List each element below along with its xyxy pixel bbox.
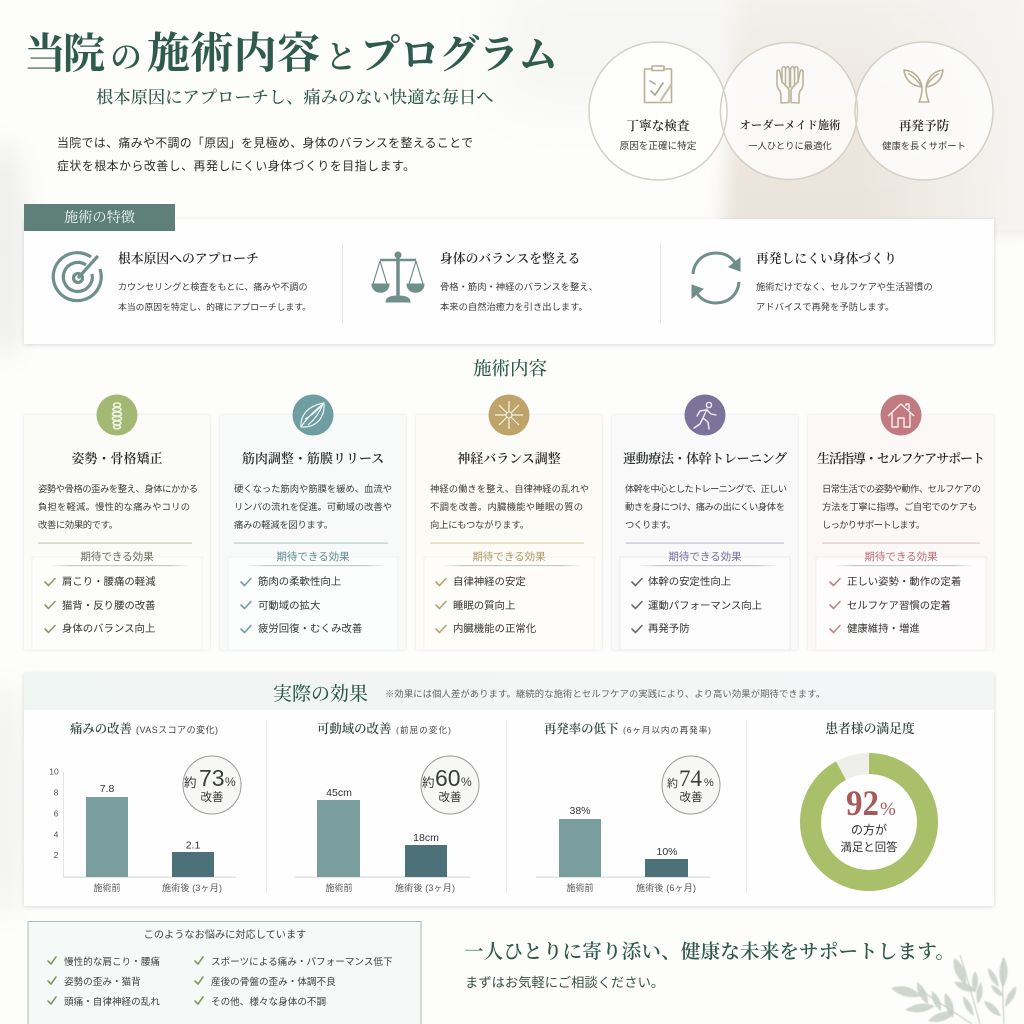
- chart: recurrence: (6ヶ月以内の再発率): [623, 725, 711, 735]
- panel: lifestyle card: しっかりサポートします。: [822, 520, 925, 530]
- promise: careful examination: 原因を正確に特定: [620, 140, 697, 152]
- closing message: 一人ひとりに寄り添い、健康な未来をサポートします。: [464, 941, 955, 963]
- chart: pain: 痛みの改善: [70, 721, 132, 736]
- promise: recurrence prevention: 再発予防: [899, 118, 950, 133]
- chart: satisfaction donut: [810, 721, 928, 880]
- panel: posture card: [24, 394, 210, 650]
- title: 当院: [24, 31, 105, 78]
- panel: posture card: 姿勢や骨格の歪みを整え、身体にかかる: [38, 483, 198, 494]
- closing message: [464, 941, 955, 990]
- panel: exercise card: 運動療法・体幹トレーニング: [623, 451, 787, 466]
- effects box: 正しい姿勢・動作の定着: [847, 575, 961, 588]
- panel: nerve card: [416, 394, 602, 650]
- title: [24, 30, 558, 78]
- panel: lifestyle card: 生活指導・セルフケアサポート: [817, 451, 985, 466]
- bar: before: 38%: [569, 805, 591, 817]
- intro text: 症状を根本から改善し、再発しにくい身体づくりを目指します。: [57, 159, 415, 173]
- heading: treatment content: 施術内容: [473, 359, 547, 380]
- feature: root cause: [53, 251, 311, 312]
- badge: 60%: [421, 756, 479, 814]
- promise: recurrence prevention: 健康を長くサポート: [882, 140, 966, 151]
- feature: body balance: [372, 251, 598, 312]
- chart: pain: [49, 721, 241, 893]
- badge: 73%: 改善: [200, 790, 224, 804]
- panel: three promises: [589, 42, 993, 180]
- panel: muscle card: 筋肉調整・筋膜リリース: [242, 451, 384, 466]
- bar: after: 2.1: [186, 840, 200, 852]
- icon: scales: [372, 252, 424, 302]
- title: と: [325, 39, 357, 75]
- feature: recurrence resistant body: アドバイスで再発を予防します。: [756, 301, 894, 312]
- bar: before: 45cm: [326, 787, 352, 799]
- effects box: 期待できる効果: [472, 550, 546, 563]
- closing message: まずはお気軽にご相談ください。: [465, 975, 664, 990]
- badge: 74%: [662, 756, 720, 814]
- feature: recurrence resistant body: 再発しにくい身体づくり: [756, 251, 897, 266]
- panel: muscle card: 硬くなった筋肉や筋膜を緩め、血流や: [234, 483, 392, 494]
- icon: cycle arrows: [692, 253, 740, 303]
- panel: conditions list: 頭痛・自律神経の乱れ: [64, 996, 160, 1008]
- chart: satisfaction donut: 92: [846, 783, 879, 823]
- chart: satisfaction donut: 満足と回答: [841, 840, 898, 854]
- panel: nerve card: 神経の働きを整え、自律神経の乱れや: [430, 483, 589, 494]
- chart: pain: 4: [54, 830, 59, 840]
- chart: pain: 2: [54, 850, 59, 860]
- chart: pain: 8: [54, 788, 59, 798]
- panel: conditions list: [28, 922, 421, 1024]
- bar: before: 施術前: [566, 882, 594, 893]
- effects box: 運動パフォーマンス向上: [648, 599, 762, 612]
- badge: 74%: %: [704, 777, 714, 789]
- badge: 73%: 73: [199, 765, 225, 791]
- feature: root cause: 根本原因へのアプローチ: [118, 251, 259, 266]
- bar: before: 施術前: [93, 882, 121, 893]
- chart: pain: 6: [54, 808, 59, 818]
- bar: before: [86, 783, 128, 893]
- effects box: 筋肉の柔軟性向上: [258, 575, 341, 588]
- badge: 60%: 改善: [438, 790, 462, 804]
- badge: 74%: 改善: [680, 790, 702, 804]
- effects box: 疲労回復・むくみ改善: [258, 622, 362, 635]
- bar: after: 10%: [656, 846, 678, 858]
- panel: exercise card: [612, 394, 798, 650]
- title: の: [110, 39, 142, 75]
- panel: posture card: 姿勢・骨格矯正: [71, 451, 163, 466]
- badge: 60%: 約: [422, 775, 435, 790]
- panel: lifestyle card: [808, 394, 994, 650]
- panel: conditions list: 産後の骨盤の歪み・体調不良: [211, 976, 336, 988]
- effects box: 肩こり・腰痛の軽減: [62, 575, 156, 588]
- effects box: 期待できる効果: [864, 550, 938, 563]
- badge: 60%: 60: [435, 765, 461, 791]
- panel: conditions list: 姿勢の歪み・猫背: [64, 976, 141, 988]
- effects box: 内臓機能の正常化: [453, 622, 537, 635]
- intro text: [57, 136, 473, 173]
- effects box: 睡眠の質向上: [453, 599, 515, 612]
- panel: posture card: 改善に効果的です。: [38, 519, 118, 530]
- chart: range of motion: (前屈の変化): [396, 725, 451, 735]
- panel: nerve card: 神経バランス調整: [457, 451, 561, 466]
- chart: pain: (VASスコアの変化): [136, 724, 218, 735]
- panel: treatment features: [24, 204, 994, 344]
- chart: recurrence: 再発率の低下: [544, 721, 619, 736]
- effects box: 健康維持・増進: [847, 622, 920, 635]
- icon: runner: [684, 394, 726, 436]
- badge: 74%: 約: [667, 776, 678, 790]
- bar: before: [559, 805, 601, 893]
- effects box: 再発予防: [648, 622, 690, 635]
- promise: careful examination: 丁寧な検査: [627, 118, 690, 133]
- effects box: 期待できる効果: [668, 550, 742, 563]
- effects box: 可動域の拡大: [258, 599, 320, 612]
- effects box: [32, 550, 202, 650]
- effects box: 身体のバランス向上: [62, 622, 155, 635]
- bar: before: [317, 787, 360, 893]
- panel: conditions list: このようなお悩みに対応しています: [144, 928, 306, 941]
- panel: muscle card: 痛みの軽減を図ります。: [234, 519, 333, 530]
- icon: muscle leaf: [292, 394, 334, 436]
- effects box: [228, 550, 398, 650]
- bar: after: 施術後 (3ヶ月): [395, 882, 455, 893]
- feature: body balance: 骨格・筋肉・神経のバランスを整え、: [440, 281, 598, 292]
- badge: 60%: %: [461, 775, 472, 789]
- decorative leaves: [891, 955, 1016, 1024]
- chart: satisfaction donut: 患者様の満足度: [825, 721, 915, 736]
- icon: house: [880, 394, 922, 436]
- chart: satisfaction donut: の方が: [851, 822, 887, 837]
- effects box: [424, 550, 594, 650]
- promise: custom treatment: 一人ひとりに最適化: [748, 140, 832, 151]
- bar: after: [395, 832, 455, 893]
- panel: exercise card: つくります。: [625, 520, 676, 530]
- effects box: セルフケア習慣の定着: [847, 599, 951, 612]
- chart: recurrence: [536, 721, 720, 893]
- panel: muscle card: リンパの流れを促進。可動域の改善や: [234, 501, 392, 512]
- bar: before: 施術前: [325, 882, 353, 893]
- icon: clipboard: [644, 66, 672, 102]
- note: ※効果には個人差があります。継続的な施術とセルフケアの実践により、より高い効果が期待できます。: [385, 688, 825, 699]
- promise: careful examination: [589, 42, 727, 180]
- effects box: [620, 550, 790, 650]
- effects box: 体幹の安定性向上: [648, 575, 731, 588]
- feature: recurrence resistant body: [692, 251, 933, 312]
- panel: nerve card: 不調を改善。内臓機能や睡眠の質の: [430, 501, 583, 512]
- icon: target: [53, 253, 101, 301]
- bar: after: 施術後 (6ヶ月): [636, 882, 696, 893]
- promise: recurrence prevention: [855, 42, 993, 180]
- bar: after: [636, 846, 696, 893]
- intro text: 当院では、痛みや不調の「原因」を見極め、身体のバランスを整えることで: [57, 136, 473, 150]
- title: プログラム: [360, 32, 558, 77]
- icon: spine: [96, 394, 138, 436]
- bar: after: [162, 840, 222, 893]
- effects box: [816, 550, 986, 650]
- effects box: 期待できる効果: [80, 550, 154, 563]
- effects box: 猫背・反り腰の改善: [62, 599, 156, 612]
- panel: exercise card: 体幹を中心としたトレーニングで、正しい: [625, 483, 787, 494]
- feature: body balance: 本来の自然治癒力を引き出します。: [440, 301, 588, 312]
- title: 施術内容: [147, 30, 320, 78]
- bar: after: 施術後 (3ヶ月): [162, 882, 222, 893]
- chart: satisfaction donut: %: [880, 799, 896, 820]
- panel: nerve card: 向上にもつながります。: [430, 519, 529, 530]
- effects box: 自律神経の安定: [453, 575, 526, 588]
- panel: exercise card: 動きを身につけ、痛みの出にくい身体を: [625, 501, 785, 512]
- heading tag: [24, 204, 175, 231]
- heading: results: 実際の効果: [273, 683, 368, 705]
- panel: actual results: [24, 673, 994, 906]
- panel: conditions list: 慢性的な肩こり・腰痛: [64, 956, 160, 968]
- bar: before: 7.8: [100, 783, 114, 795]
- feature: root cause: 本当の原因を特定し、的確にアプローチします。: [118, 301, 311, 312]
- badge: 73%: 約: [184, 775, 197, 790]
- chart: range of motion: [295, 721, 479, 893]
- panel: posture card: 負担を軽減。慢性的な痛みやコリの: [38, 501, 190, 512]
- feature: body balance: 身体のバランスを整える: [440, 251, 580, 266]
- promise: custom treatment: オーダーメイド施術: [740, 118, 840, 132]
- subtitle: 根本原因にアプローチし、痛みのない快適な毎日へ: [96, 87, 493, 107]
- chart: range of motion: 可動域の改善: [317, 721, 391, 736]
- badge: 73%: [183, 756, 241, 814]
- panel: muscle card: [220, 394, 406, 650]
- bar: after: 18cm: [413, 832, 439, 844]
- feature: root cause: カウンセリングと検査をもとに、痛みや不調の: [118, 281, 308, 292]
- icon: sprout: [904, 70, 943, 102]
- heading tag: 施術の特徴: [64, 209, 135, 226]
- panel: conditions list: スポーツによる痛み・パフォーマンス低下: [211, 956, 393, 968]
- panel: lifestyle card: 方法を丁寧に指導。ご自宅でのケアも: [822, 501, 977, 512]
- icon: hands: [777, 67, 803, 103]
- badge: 74%: 74: [679, 766, 702, 791]
- promise: custom treatment: [720, 42, 858, 180]
- feature: recurrence resistant body: 施術だけでなく、セルフケアや生活習慣の: [756, 281, 933, 292]
- badge: 73%: %: [225, 775, 236, 789]
- chart: pain: 10: [49, 766, 59, 776]
- panel: lifestyle card: 日常生活での姿勢や動作、セルフケアの: [822, 483, 981, 494]
- panel: conditions list: その他、様々な身体の不調: [211, 996, 326, 1008]
- icon: nerve burst: [488, 394, 530, 436]
- effects box: 期待できる効果: [276, 550, 350, 563]
